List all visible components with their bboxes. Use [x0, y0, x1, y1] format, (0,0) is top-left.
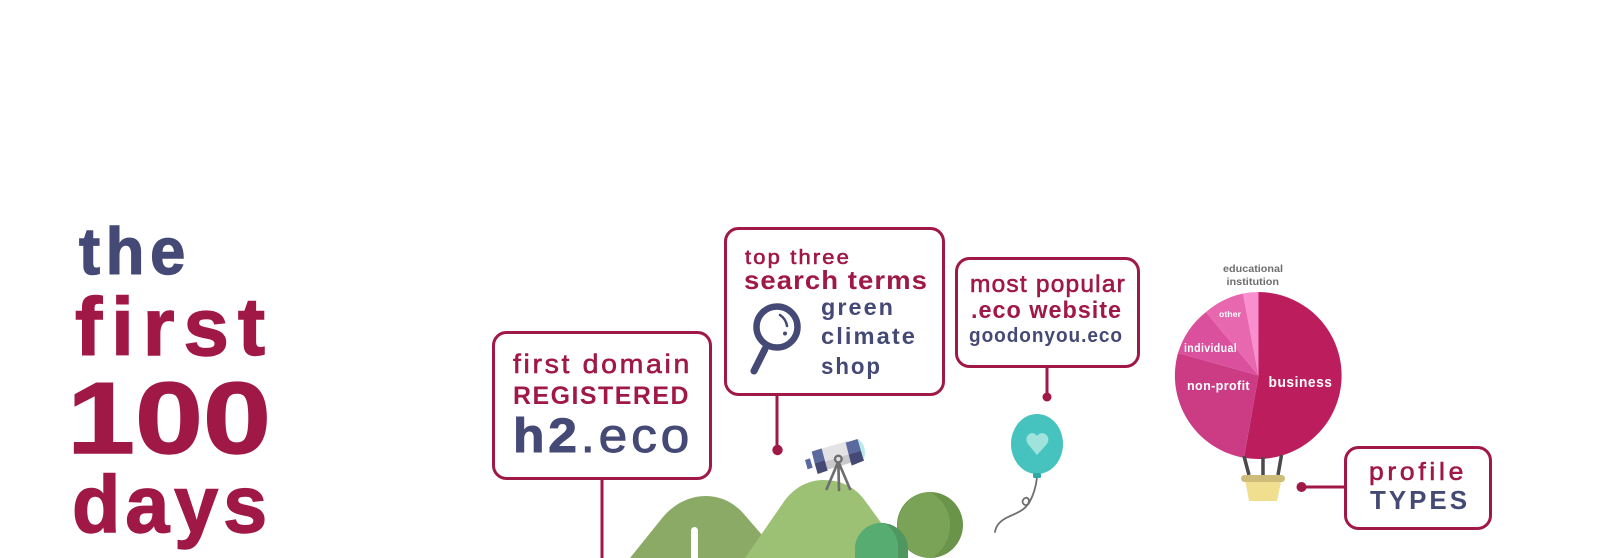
callout: profile types: profile: [1369, 458, 1467, 486]
icon: heart: [1027, 433, 1048, 455]
title: the first 100 days: days: [72, 460, 272, 550]
chart: profile types pie balloon: other: [1219, 309, 1242, 319]
chart: profile types pie balloon: institution: [1226, 276, 1279, 288]
callout: top three search terms: top three: [745, 247, 851, 269]
callout: most popular .eco website: .eco website: [971, 297, 1122, 324]
callout: top three search terms: green: [821, 294, 895, 320]
connector: profile types: [1296, 482, 1345, 492]
callout: most popular .eco website: [956, 258, 1138, 366]
icon: magnifying glass: [754, 306, 798, 371]
connector: search terms: [772, 395, 783, 455]
illustration: hills: [630, 480, 907, 558]
callout: top three search terms: climate: [821, 323, 917, 349]
callout: profile types: [1346, 448, 1490, 528]
title: the first 100 days: the: [79, 214, 191, 288]
callout: first domain registered: [494, 332, 710, 478]
title: the first 100 days: [67, 214, 274, 550]
illustration: telescope: [805, 439, 865, 490]
callout: most popular .eco website: most popular: [970, 271, 1126, 298]
illustration: green bush: [855, 523, 908, 558]
title: the first 100 days: first: [75, 282, 274, 373]
callout: first domain registered: REGISTERED: [513, 382, 690, 410]
callout: first domain registered: h2.eco: [513, 410, 693, 463]
chart: profile types pie balloon: [1175, 263, 1342, 459]
illustration: balloon basket: [1241, 455, 1285, 501]
chart: profile types pie balloon: individual: [1184, 343, 1237, 355]
callout: top three search terms: [726, 228, 944, 394]
connector: first domain: [600, 479, 604, 558]
chart: profile types pie balloon: non-profit: [1187, 378, 1250, 393]
callout: most popular .eco website: goodonyou.eco: [969, 325, 1123, 347]
callout: first domain registered: first domain: [513, 349, 692, 379]
callout: top three search terms: search terms: [744, 265, 928, 295]
chart: profile types pie balloon: educational: [1223, 263, 1283, 275]
connector: most popular website: [1042, 367, 1052, 402]
callout: profile types: TYPES: [1370, 485, 1470, 515]
callout: top three search terms: shop: [821, 353, 882, 379]
chart: profile types pie balloon: business: [1268, 374, 1332, 391]
illustration: round tree: [897, 492, 963, 558]
title: the first 100 days: 100: [67, 363, 271, 475]
illustration: balloon: [995, 414, 1063, 532]
